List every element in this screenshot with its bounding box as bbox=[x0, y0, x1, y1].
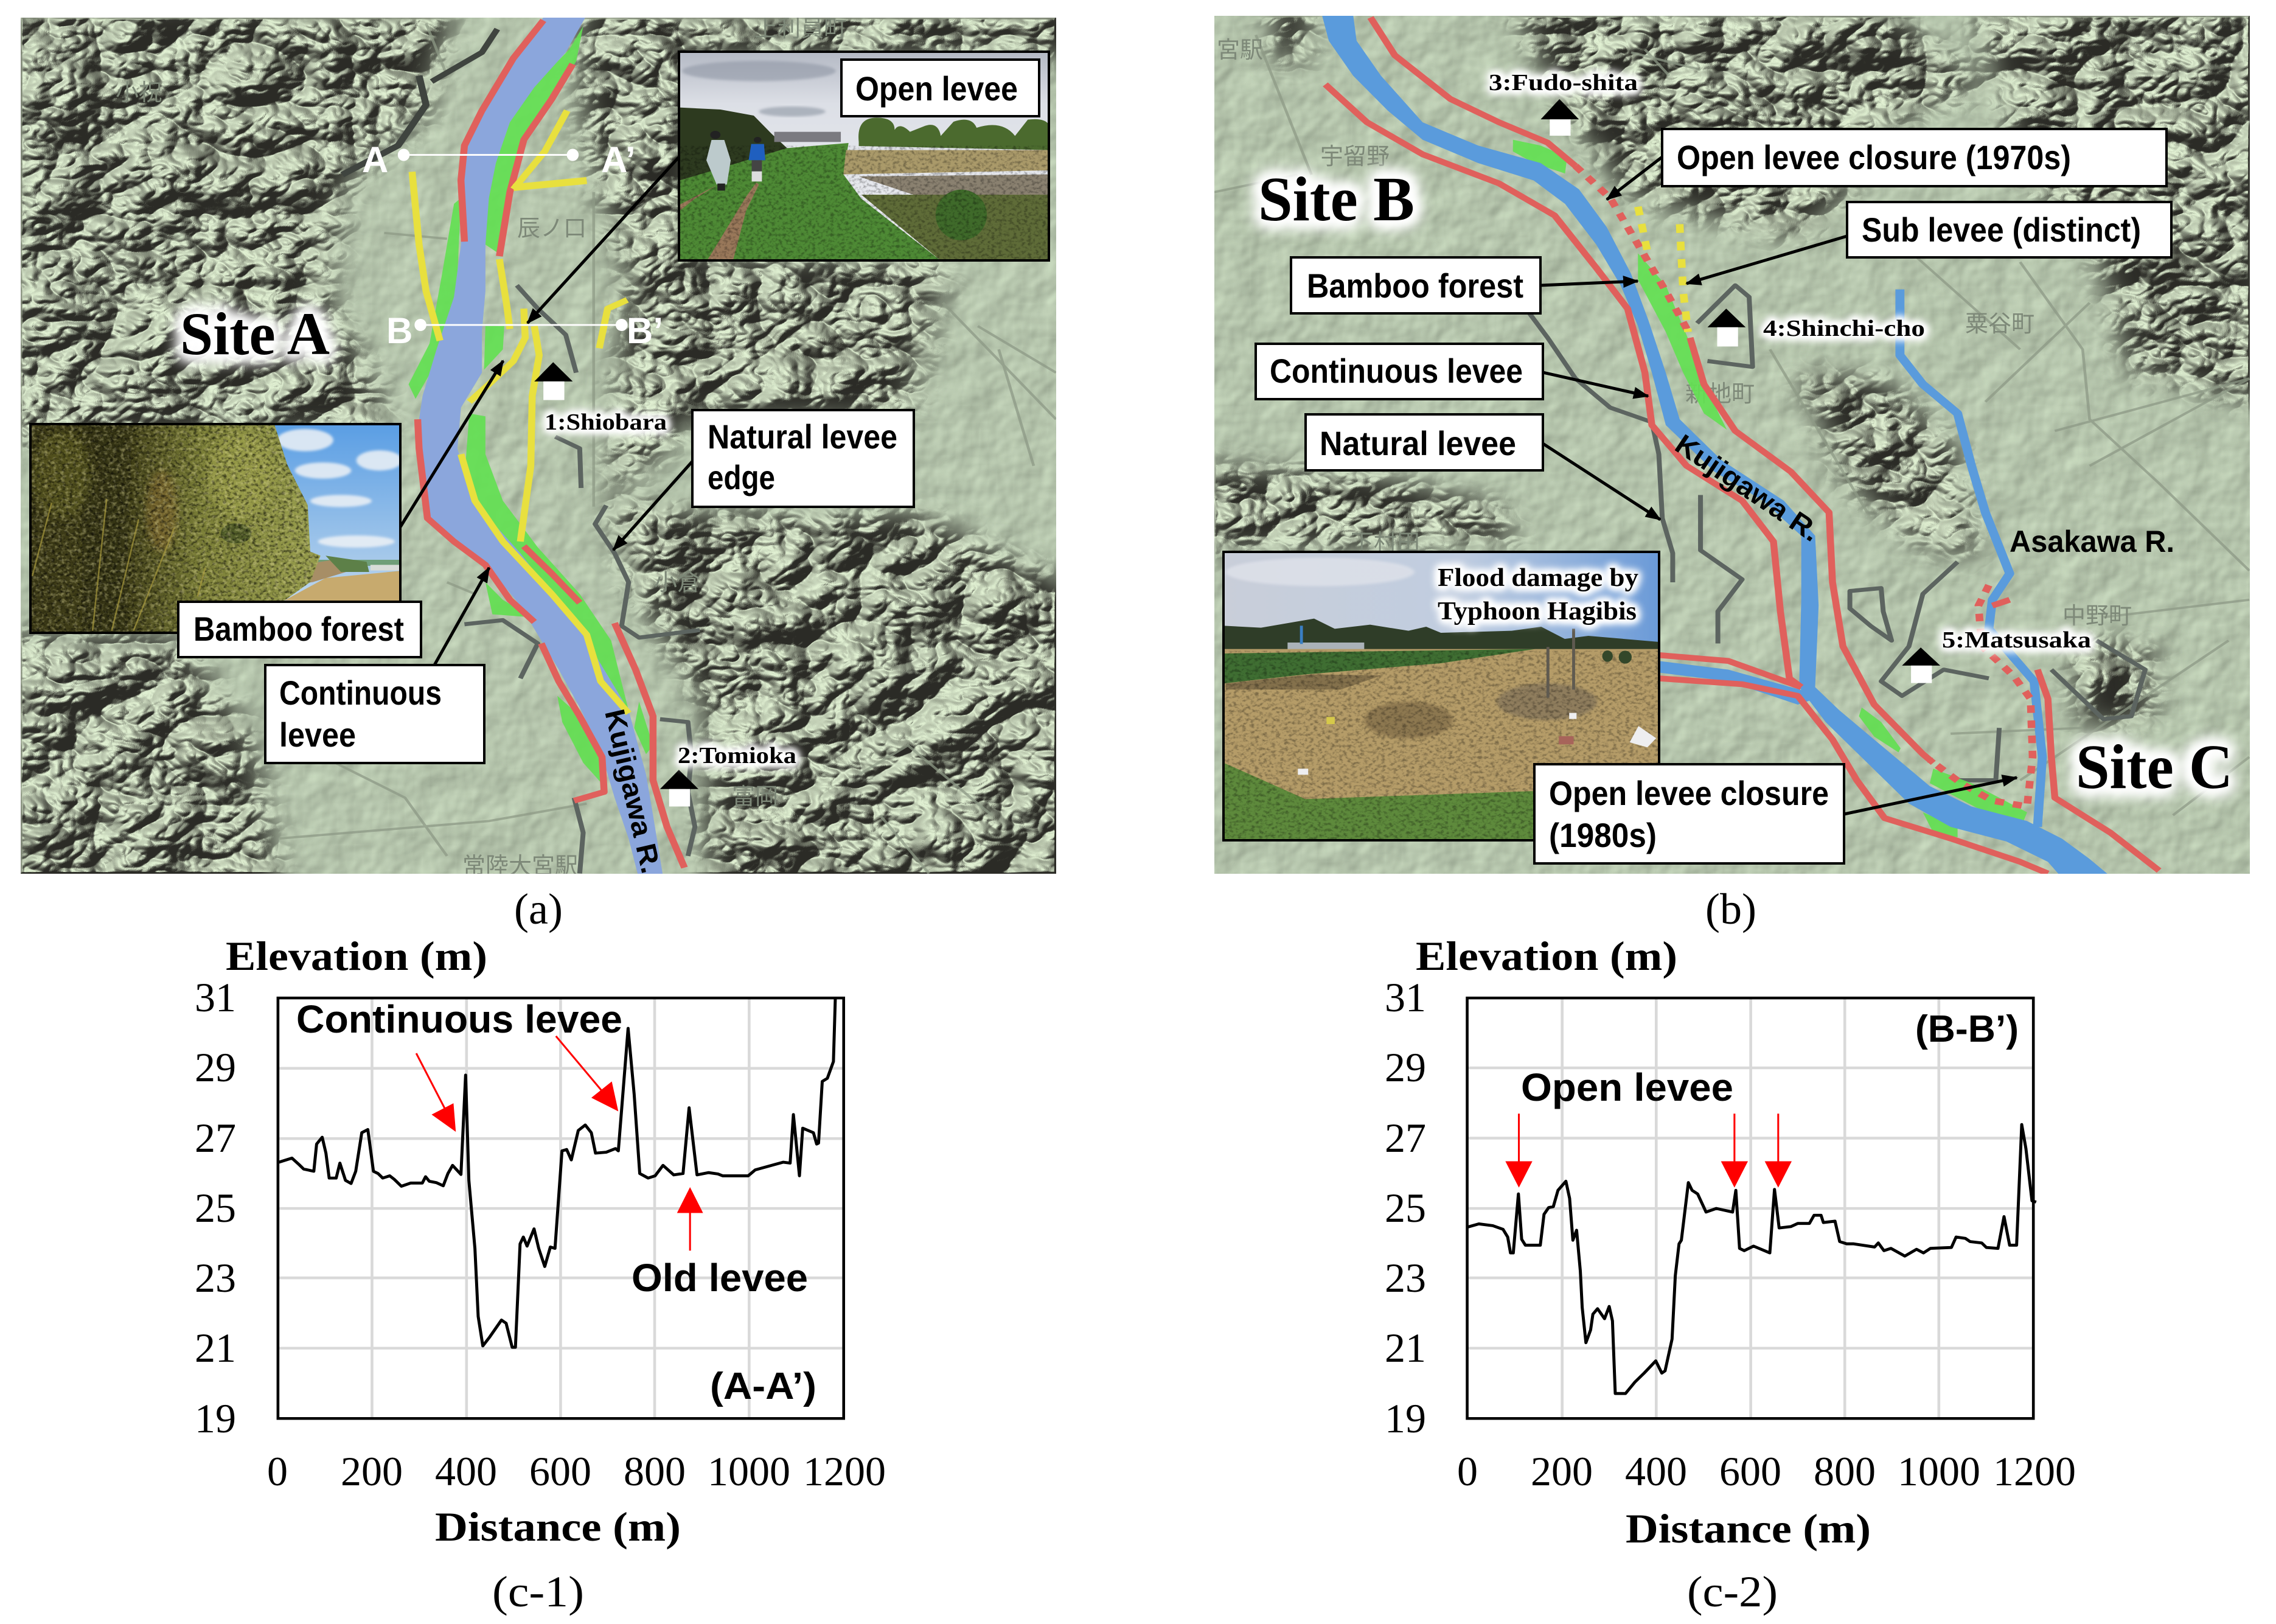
callout: natural levee edge bbox=[692, 410, 914, 507]
photo: flood damage bbox=[1223, 552, 1660, 842]
icon: house 4 bbox=[1707, 308, 1745, 346]
river: Kujigawa bbox=[1322, 15, 2114, 879]
roads and place names b: 粟谷町 bbox=[1965, 312, 2034, 337]
icon: house 2 bbox=[660, 770, 698, 806]
x axis title 1: Distance (m) bbox=[435, 1504, 681, 1550]
callout: open levee bbox=[841, 60, 1039, 116]
natural levee edges b bbox=[1513, 285, 2145, 780]
site c label: Site C bbox=[2076, 732, 2233, 802]
x ticks 1: 400 bbox=[435, 1448, 497, 1494]
roads and place names b bbox=[1214, 35, 2249, 815]
callout: open levee closure 1970s bbox=[1662, 129, 2166, 186]
roads and place names a: 上利員町 bbox=[754, 16, 847, 42]
continuous levees a bbox=[418, 20, 684, 868]
river name Asakawa: Asakawa R. bbox=[2010, 524, 2174, 559]
section labels a: B bbox=[386, 310, 412, 351]
y ticks 2: 21 bbox=[1385, 1325, 1426, 1371]
y ticks 1: 29 bbox=[195, 1044, 236, 1090]
x ticks 2: 1000 bbox=[1898, 1448, 1980, 1494]
roads and place names b: 新地町 bbox=[1685, 382, 1755, 407]
site a label: Site A bbox=[180, 300, 330, 368]
x ticks 1 bbox=[267, 1448, 886, 1494]
callout: open levee: Open levee bbox=[855, 69, 1018, 108]
y ticks 1 bbox=[195, 974, 236, 1441]
y ticks 2: 19 bbox=[1385, 1395, 1426, 1441]
sub levee (dashed) bbox=[1638, 207, 1688, 332]
y ticks 2: 29 bbox=[1385, 1044, 1426, 1090]
place label 2: 2:Tomioka bbox=[678, 743, 796, 768]
elevation trace 1 bbox=[279, 999, 835, 1347]
y ticks 2: 27 bbox=[1385, 1115, 1426, 1161]
caption a: (a) bbox=[514, 885, 563, 933]
levee and river overlays b bbox=[1322, 15, 2159, 879]
place label 1: 1:Shiobara bbox=[545, 409, 667, 435]
callout: bamboo forest a: Bamboo forest bbox=[193, 610, 404, 648]
callout: bamboo forest a bbox=[178, 602, 421, 657]
label section A-A': (A-A’) bbox=[710, 1365, 816, 1407]
roads and place names b: 宇留野 bbox=[1320, 144, 1390, 170]
roads and place names a: 常陸大宮駅 bbox=[462, 854, 578, 879]
x ticks 2: 800 bbox=[1814, 1448, 1876, 1494]
river name b: Kujigawa R. bbox=[1669, 428, 1826, 548]
label continuous levee: Continuous levee bbox=[296, 997, 622, 1041]
section labels a: B’ bbox=[627, 310, 663, 351]
red arrows 1 bbox=[416, 1036, 703, 1250]
icon: house 1 bbox=[534, 362, 572, 400]
roads and place names a: 小倉 bbox=[654, 570, 700, 596]
callout: continuous levee a: Continuous bbox=[279, 674, 442, 712]
photo: open levee bbox=[679, 52, 1049, 260]
y ticks 2: 25 bbox=[1385, 1185, 1426, 1231]
panel: map a (Site A) bbox=[21, 16, 1056, 879]
callout: continuous levee a bbox=[265, 665, 484, 763]
callout: natural levee bbox=[1306, 414, 1543, 470]
flood photo frame and caption: Flood damage by bbox=[1438, 564, 1638, 592]
section labels a: A bbox=[362, 139, 388, 180]
terrain base a bbox=[21, 18, 1056, 874]
x ticks 1: 600 bbox=[529, 1448, 591, 1494]
x ticks 2: 600 bbox=[1719, 1448, 1781, 1494]
callout: bamboo forest b bbox=[1291, 257, 1540, 313]
terrain hills b bbox=[1214, 16, 2250, 874]
flood photo frame and caption bbox=[1223, 552, 1659, 840]
x ticks 2: 400 bbox=[1625, 1448, 1687, 1494]
section labels a: A’ bbox=[601, 139, 636, 180]
x ticks 1: 0 bbox=[267, 1448, 288, 1494]
caption c-2: (c-2) bbox=[1687, 1567, 1778, 1616]
photo: bamboo forest bbox=[30, 424, 402, 633]
callout: natural levee edge: Natural levee bbox=[708, 417, 897, 456]
label old levee: Old levee bbox=[632, 1256, 808, 1300]
x ticks 2: 1200 bbox=[1993, 1448, 2076, 1494]
closed open levees (dashed) bbox=[1576, 166, 2033, 806]
place label 5: 5:Matsusaka bbox=[1942, 627, 2091, 653]
place label 3: 3:Fudo-shita bbox=[1489, 70, 1638, 96]
callout: continuous levee b bbox=[1256, 344, 1543, 399]
levee and river overlays a bbox=[343, 18, 700, 879]
x ticks 2 bbox=[1457, 1448, 2076, 1494]
chart: elevation profile A-A' bbox=[195, 933, 886, 1616]
y ticks 2 bbox=[1385, 974, 1426, 1441]
bamboo forest zones a bbox=[409, 26, 653, 786]
site b label: Site B bbox=[1258, 164, 1415, 234]
x ticks 1: 1200 bbox=[803, 1448, 886, 1494]
arrows b bbox=[1540, 157, 2017, 814]
caption b: (b) bbox=[1705, 885, 1756, 933]
river name a: Kujigawa R. bbox=[599, 706, 667, 876]
callout: sub levee bbox=[1847, 202, 2171, 257]
callout: open levee closure 1980s: Open levee closure bbox=[1549, 774, 1829, 812]
callout: open levee closure 1980s: (1980s) bbox=[1549, 816, 1657, 854]
section lines a bbox=[399, 150, 627, 330]
label open levee: Open levee bbox=[1521, 1065, 1733, 1109]
y ticks 1: 23 bbox=[195, 1255, 236, 1301]
callout: continuous levee a: levee bbox=[279, 716, 356, 754]
elevation trace 2 bbox=[1467, 1124, 2036, 1393]
natural levee edges a bbox=[343, 29, 700, 874]
callout: bamboo forest b: Bamboo forest bbox=[1307, 267, 1523, 305]
photo frames a bbox=[30, 52, 1049, 633]
river a bbox=[419, 18, 664, 879]
x ticks 1: 800 bbox=[624, 1448, 686, 1494]
plot area 1 bbox=[278, 998, 844, 1418]
x ticks 1: 200 bbox=[341, 1448, 403, 1494]
roads and place names b: 中野町 bbox=[2062, 604, 2132, 629]
terrain base b bbox=[1214, 16, 2250, 874]
terrain hills a bbox=[21, 18, 1056, 874]
callout: open levee closure 1980s bbox=[1534, 764, 1844, 863]
callout: natural levee: Natural levee bbox=[1320, 424, 1516, 462]
open levees a bbox=[412, 111, 628, 713]
caption c-1: (c-1) bbox=[492, 1567, 584, 1616]
roads and place names a: 富岡 bbox=[732, 784, 778, 810]
roads and place names a: 小祝 bbox=[116, 80, 162, 106]
continuous levees b bbox=[1325, 18, 2159, 874]
callout: continuous levee b: Continuous levee bbox=[1270, 352, 1523, 390]
y axis title 2: Elevation (m) bbox=[1416, 933, 1677, 979]
roads and place names a: 辰ノ口 bbox=[517, 216, 586, 242]
callout: sub levee: Sub levee (distinct) bbox=[1862, 211, 2141, 249]
y ticks 1: 19 bbox=[195, 1395, 236, 1441]
y ticks 2: 31 bbox=[1385, 974, 1426, 1020]
red arrows 2 bbox=[1505, 1113, 1792, 1188]
callout: natural levee edge: edge bbox=[708, 458, 775, 497]
chart: elevation profile B-B' bbox=[1385, 933, 2076, 1616]
river: Asakawa bbox=[1900, 290, 2042, 827]
x ticks 1: 1000 bbox=[708, 1448, 790, 1494]
y ticks 1: 21 bbox=[195, 1325, 236, 1371]
roads and place names a bbox=[116, 16, 1056, 879]
section labels a bbox=[362, 139, 663, 351]
roads and place names b: 下村田 bbox=[1351, 531, 1420, 556]
flood photo frame and caption: Typhoon Hagibis bbox=[1438, 598, 1637, 626]
icon: house 5 bbox=[1902, 647, 1940, 683]
y ticks 2: 23 bbox=[1385, 1255, 1426, 1301]
arrows a bbox=[400, 157, 694, 665]
tributary bbox=[1659, 661, 1815, 705]
x ticks 2: 0 bbox=[1457, 1448, 1478, 1494]
panel: map b (Sites B and C) bbox=[1214, 15, 2250, 879]
place label 4: 4:Shinchi-cho bbox=[1763, 316, 1925, 341]
y ticks 1: 31 bbox=[195, 974, 236, 1020]
y ticks 1: 25 bbox=[195, 1185, 236, 1231]
x axis title 2: Distance (m) bbox=[1626, 1505, 1871, 1552]
label section B-B': (B-B’) bbox=[1915, 1008, 2019, 1050]
y axis title 1: Elevation (m) bbox=[226, 933, 487, 979]
x ticks 2: 200 bbox=[1531, 1448, 1593, 1494]
bamboo forest zones b bbox=[1513, 140, 2027, 837]
plot area 2 bbox=[1467, 998, 2036, 1418]
icon: house 3 bbox=[1540, 99, 1579, 136]
callout: open levee closure 1970s: Open levee closure (1970s) bbox=[1677, 138, 2071, 176]
roads and place names b: 宮駅 bbox=[1217, 38, 1263, 63]
y ticks 1: 27 bbox=[195, 1115, 236, 1161]
